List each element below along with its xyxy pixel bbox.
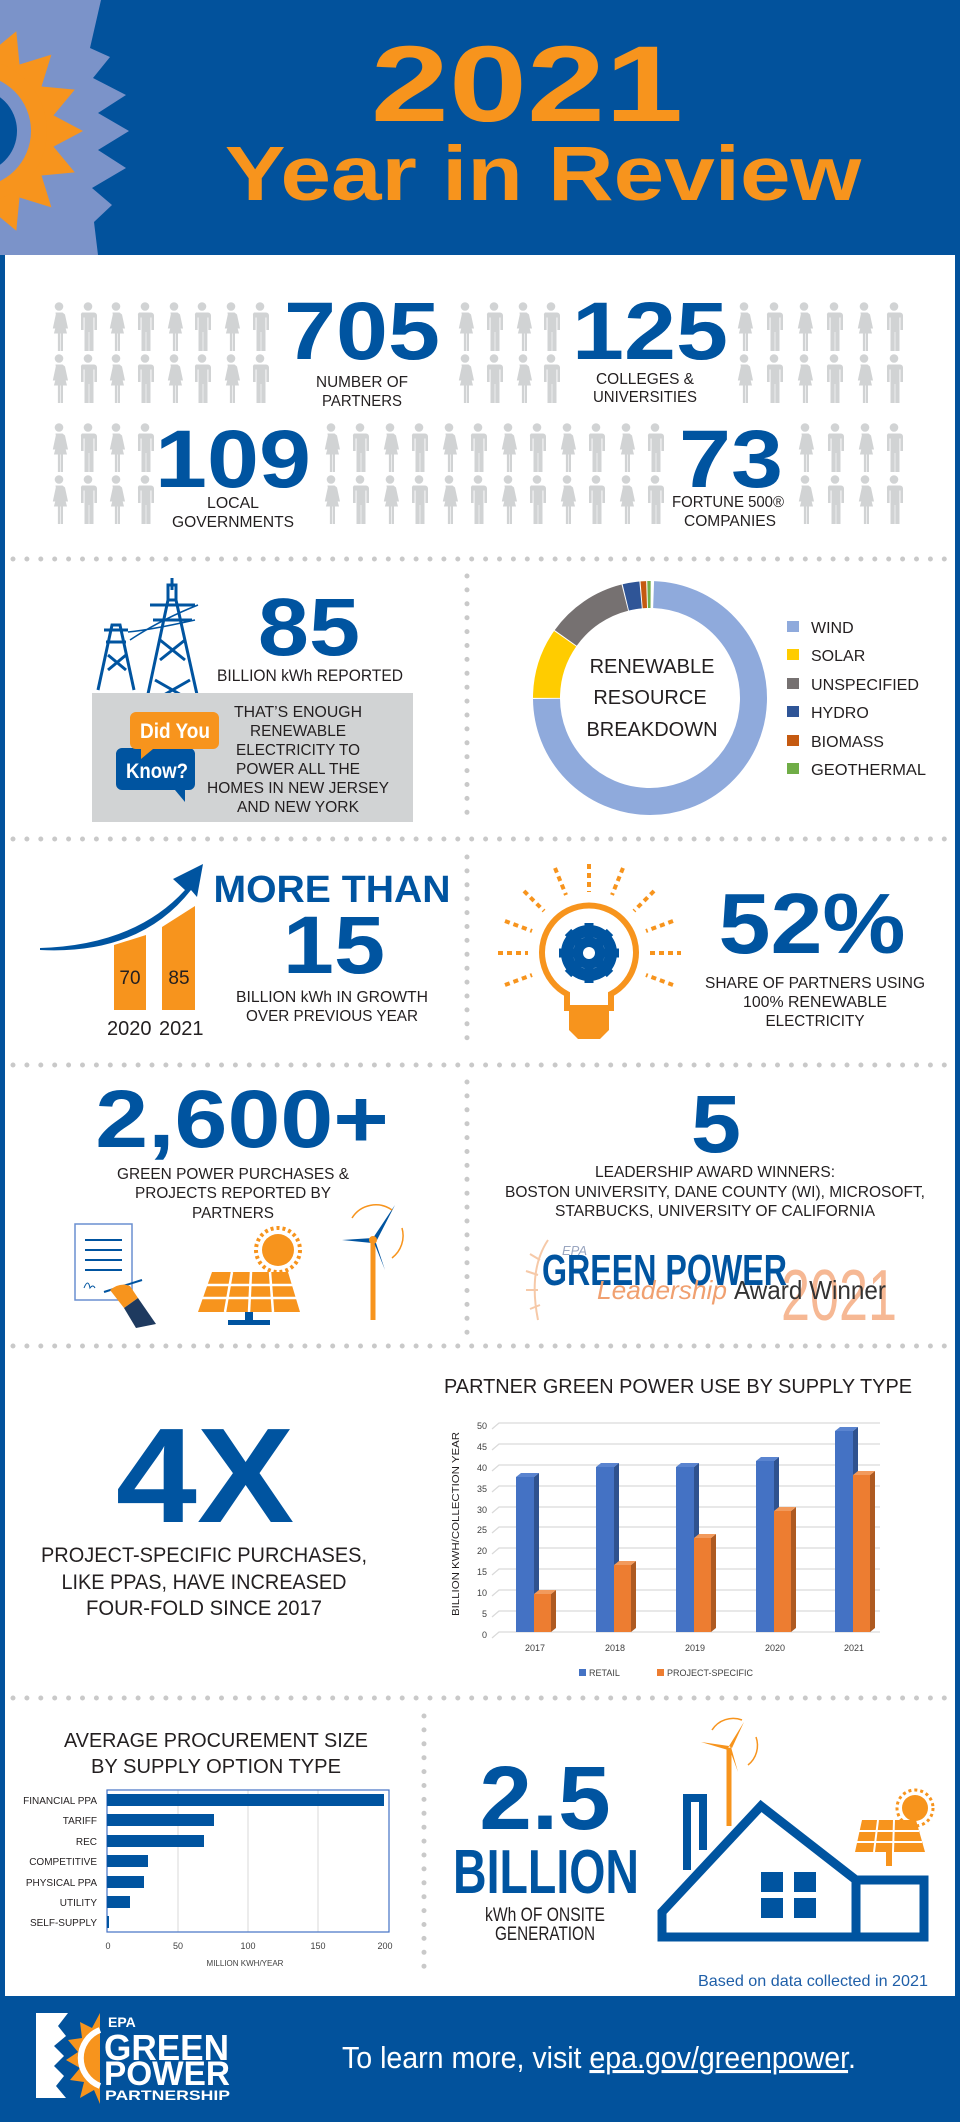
- people pictogram grid: [53, 302, 903, 524]
- logo: green power leadership award: GREEN POWER: [542, 1246, 787, 1295]
- legend: UNSPECIFIED: [811, 677, 919, 694]
- caption: four-fold: LIKE PPAS, HAVE INCREASED: [62, 1571, 346, 1594]
- chart: average procurement size: 200: [377, 1941, 393, 1951]
- chart: partner green power use by supply type: 2018: [605, 1643, 625, 1653]
- logo: green power leadership award: [526, 1240, 897, 1336]
- logo: EPA green power partnership: GREEN: [104, 2027, 229, 2068]
- note: data source: Based on data collected in 2021: [698, 1973, 928, 1990]
- chart: average procurement size: [23, 1730, 393, 1968]
- caption: four-fold: PROJECT-SPECIFIC PURCHASES,: [41, 1544, 367, 1567]
- stat: 125 colleges: COLLEGES &: [596, 371, 694, 388]
- caption: share of partners: SHARE OF PARTNERS USING: [705, 975, 925, 992]
- caption: onsite generation: [485, 1905, 605, 1945]
- stat: more than 15: 15: [283, 900, 385, 991]
- stat: 73 Fortune 500: 73: [679, 412, 783, 505]
- caption: share of partners: ELECTRICITY: [766, 1013, 865, 1030]
- callout: did you know box: AND NEW YORK: [237, 799, 359, 816]
- stat: 2.5 billion: 2.5: [479, 1747, 611, 1849]
- stat: 125 colleges: 125: [572, 284, 728, 377]
- title: Year in Review: Year in Review: [225, 131, 862, 216]
- chart: partner green power use by supply type: [444, 1376, 912, 1678]
- caption: four-fold: FOUR-FOLD SINCE 2017: [86, 1597, 322, 1620]
- chart: partner green power use by supply type: 35: [477, 1484, 487, 1494]
- panel: 5 leadership award winners: [505, 1079, 925, 1336]
- donut center label: [586, 656, 718, 741]
- panel: partner counts: [53, 284, 903, 531]
- footer: [36, 2013, 856, 2104]
- legend: HYDRO: [811, 705, 869, 722]
- caption: award winners: LEADERSHIP AWARD WINNERS:: [595, 1164, 835, 1181]
- caption: purchases: PROJECTS REPORTED BY: [135, 1185, 331, 1202]
- callout: did you know box: RENEWABLE: [250, 723, 346, 740]
- logo: green power leadership award: EPA: [562, 1243, 587, 1258]
- chart: average procurement size: TARIFF: [63, 1816, 97, 1827]
- chart: partner green power use by supply type: 5: [482, 1609, 487, 1619]
- chart: partner green power use by supply type: 45: [477, 1442, 487, 1452]
- chart: average procurement size: PHYSICAL PPA: [26, 1878, 97, 1889]
- chart: average procurement size: 150: [310, 1941, 326, 1951]
- callout: did you know box: POWER ALL THE: [236, 761, 360, 778]
- stat: 705 partners: NUMBER OF: [316, 374, 408, 391]
- panel: renewable resource breakdown: [543, 591, 926, 805]
- logo: EPA green power partnership: EPA: [108, 2014, 136, 2030]
- stat: more than 15: MORE THAN: [214, 869, 450, 911]
- legend: RETAIL: [589, 1668, 620, 1678]
- panel: 2,600+ purchases: [75, 1073, 403, 1328]
- icon: solar panel: [198, 1228, 300, 1325]
- chart: average procurement size: COMPETITIVE: [29, 1857, 97, 1868]
- caption: share of partners: [705, 975, 925, 1030]
- call to action: To learn more, visit epa.gov/greenpower.: [342, 2040, 856, 2075]
- chart: partner green power use by supply type: 2019: [685, 1643, 705, 1653]
- chart: partner green power use by supply type: 2021: [844, 1643, 864, 1653]
- caption: award winners: BOSTON UNIVERSITY, DANE COUNTY (WI), MICROSOFT,: [505, 1184, 925, 1201]
- legend: WIND: [811, 620, 854, 637]
- chart: partner green power use by supply type: 50: [477, 1421, 487, 1431]
- chart: average procurement size: FINANCIAL PPA: [23, 1796, 97, 1807]
- logo: EPA green power partnership: PARTNERSHIP: [105, 2087, 230, 2103]
- header banner: [0, 0, 862, 255]
- chart: average procurement size: REC: [76, 1837, 97, 1848]
- stat: 705 partners: PARTNERS: [322, 393, 402, 410]
- chart: average procurement size: AVERAGE PROCUREMENT SIZE: [64, 1730, 368, 1752]
- logo: EPA green power partnership: POWER: [104, 2055, 230, 2093]
- chart: partner green power use by supply type: 25: [477, 1525, 487, 1535]
- panel: growth more than 15: [40, 864, 450, 1040]
- stat: 2,600+: 2,600+: [95, 1073, 389, 1165]
- chart: average procurement size: BY SUPPLY OPTION TYPE: [91, 1756, 341, 1778]
- stat: 125 colleges: UNIVERSITIES: [593, 389, 697, 406]
- panel: 4X project-specific: [41, 1400, 367, 1620]
- stat: 109 local governments: LOCAL: [207, 495, 259, 512]
- logo: green power leadership award: Award Winner: [734, 1275, 886, 1305]
- caption: purchases: PARTNERS: [192, 1205, 274, 1222]
- icon: growth bars: 2020: [107, 1018, 152, 1040]
- caption: purchases: [117, 1166, 349, 1222]
- legend: GEOTHERMAL: [811, 762, 926, 779]
- bars: [516, 1427, 875, 1632]
- logo: green power leadership award: Leadership: [597, 1275, 727, 1305]
- title: 2021: 2021: [371, 24, 683, 144]
- icon: growth bars: 2021: [159, 1018, 204, 1040]
- caption: growth: [236, 989, 428, 1025]
- caption: share of partners: 100% RENEWABLE: [743, 994, 887, 1011]
- caption: four-fold: [41, 1544, 367, 1620]
- callout: did you know box: HOMES IN NEW JERSEY: [207, 780, 389, 797]
- caption: billion kWh reported: BILLION kWh REPORTED: [217, 666, 403, 685]
- chart: partner green power use by supply type: 30: [477, 1505, 487, 1515]
- stat: 73 Fortune 500: COMPANIES: [684, 513, 776, 530]
- chart: average procurement size: UTILITY: [60, 1898, 97, 1909]
- callout: did you know box: THAT’S ENOUGH: [234, 704, 362, 721]
- chart: partner green power use by supply type: 2017: [525, 1643, 545, 1653]
- legend: PROJECT-SPECIFIC: [667, 1668, 754, 1678]
- stat: 85: 85: [258, 582, 360, 673]
- chart: partner green power use by supply type: 40: [477, 1463, 487, 1473]
- caption: onsite generation: kWh OF ONSITE: [485, 1905, 605, 1926]
- chart: partner green power use by supply type: 20: [477, 1546, 487, 1556]
- stat: 73 Fortune 500: FORTUNE 500®: [672, 494, 784, 511]
- icon: contract signing: [75, 1224, 156, 1328]
- icon: growth bars: 70: [119, 968, 141, 989]
- chart: partner green power use by supply type: 0: [482, 1630, 487, 1640]
- donut center label: BREAKDOWN: [586, 719, 718, 741]
- stat: 109 local governments: GOVERNMENTS: [172, 514, 294, 531]
- chart: average procurement size: SELF-SUPPLY: [30, 1918, 97, 1929]
- chart: partner green power use by supply type: BILLION KWH/COLLECTION YEAR: [451, 1432, 462, 1616]
- donut center label: RENEWABLE: [590, 656, 714, 678]
- icon: light bulb with gear: [498, 864, 681, 1039]
- caption: growth: OVER PREVIOUS YEAR: [246, 1008, 418, 1025]
- panel: 2.5 billion onsite: BILLION: [453, 1838, 639, 1907]
- caption: award winners: [505, 1164, 925, 1220]
- chart: average procurement size: 50: [173, 1941, 183, 1951]
- arrow: upward swoosh: [40, 864, 203, 950]
- donut chart: [543, 591, 757, 805]
- stat: 52%: 52%: [718, 876, 906, 971]
- panel: 52% share: [498, 864, 925, 1039]
- chart: average procurement size: 0: [105, 1941, 111, 1951]
- stat: more than 15: [214, 869, 450, 991]
- legend: [787, 620, 926, 779]
- panel: 2.5 billion onsite: [453, 1718, 933, 1990]
- icon: growth bars: [107, 906, 204, 1040]
- chart: partner green power use by supply type: 10: [477, 1588, 487, 1598]
- callout: did you know box: Know?: [126, 760, 188, 783]
- chart: partner green power use by supply type: 2020: [765, 1643, 785, 1653]
- caption: award winners: STARBUCKS, UNIVERSITY OF CALIFORNIA: [555, 1203, 875, 1220]
- legend: [579, 1668, 754, 1678]
- legend: SOLAR: [811, 648, 865, 665]
- callout: did you know box: ELECTRICITY TO: [236, 742, 360, 759]
- callout: did you know box: Did You: [140, 720, 210, 743]
- chart: average procurement size: MILLION KWH/YEAR: [207, 1959, 284, 1968]
- callout: did you know box: [92, 693, 413, 822]
- caption: purchases: GREEN POWER PURCHASES &: [117, 1166, 349, 1183]
- stat: 705 partners: 705: [284, 284, 440, 377]
- icon: transmission towers: [98, 578, 200, 708]
- stat: 4X: 4X: [116, 1400, 294, 1551]
- caption: growth: BILLION kWh IN GROWTH: [236, 989, 428, 1006]
- chart: partner green power use by supply type: PARTNER GREEN POWER USE BY SUPPLY TYPE: [444, 1376, 912, 1398]
- stat: 5: 5: [691, 1079, 741, 1170]
- chart: average procurement size: 100: [240, 1941, 256, 1951]
- icon: header sunburst: [0, 0, 129, 255]
- icon: wind turbine: [342, 1205, 403, 1320]
- icon: house with turbine and solar: [662, 1718, 933, 1937]
- donut center label: RESOURCE: [593, 687, 707, 709]
- stat: 109 local governments: 109: [155, 412, 311, 505]
- icon: growth bars: 85: [168, 968, 190, 989]
- chart: partner green power use by supply type: 15: [477, 1567, 487, 1577]
- logo: EPA green power partnership: [36, 2013, 230, 2104]
- logo: green power leadership award: 2021: [781, 1256, 897, 1336]
- legend: BIOMASS: [811, 734, 884, 751]
- panel: 85 billion kWh: [92, 578, 413, 822]
- caption: onsite generation: GENERATION: [495, 1924, 595, 1945]
